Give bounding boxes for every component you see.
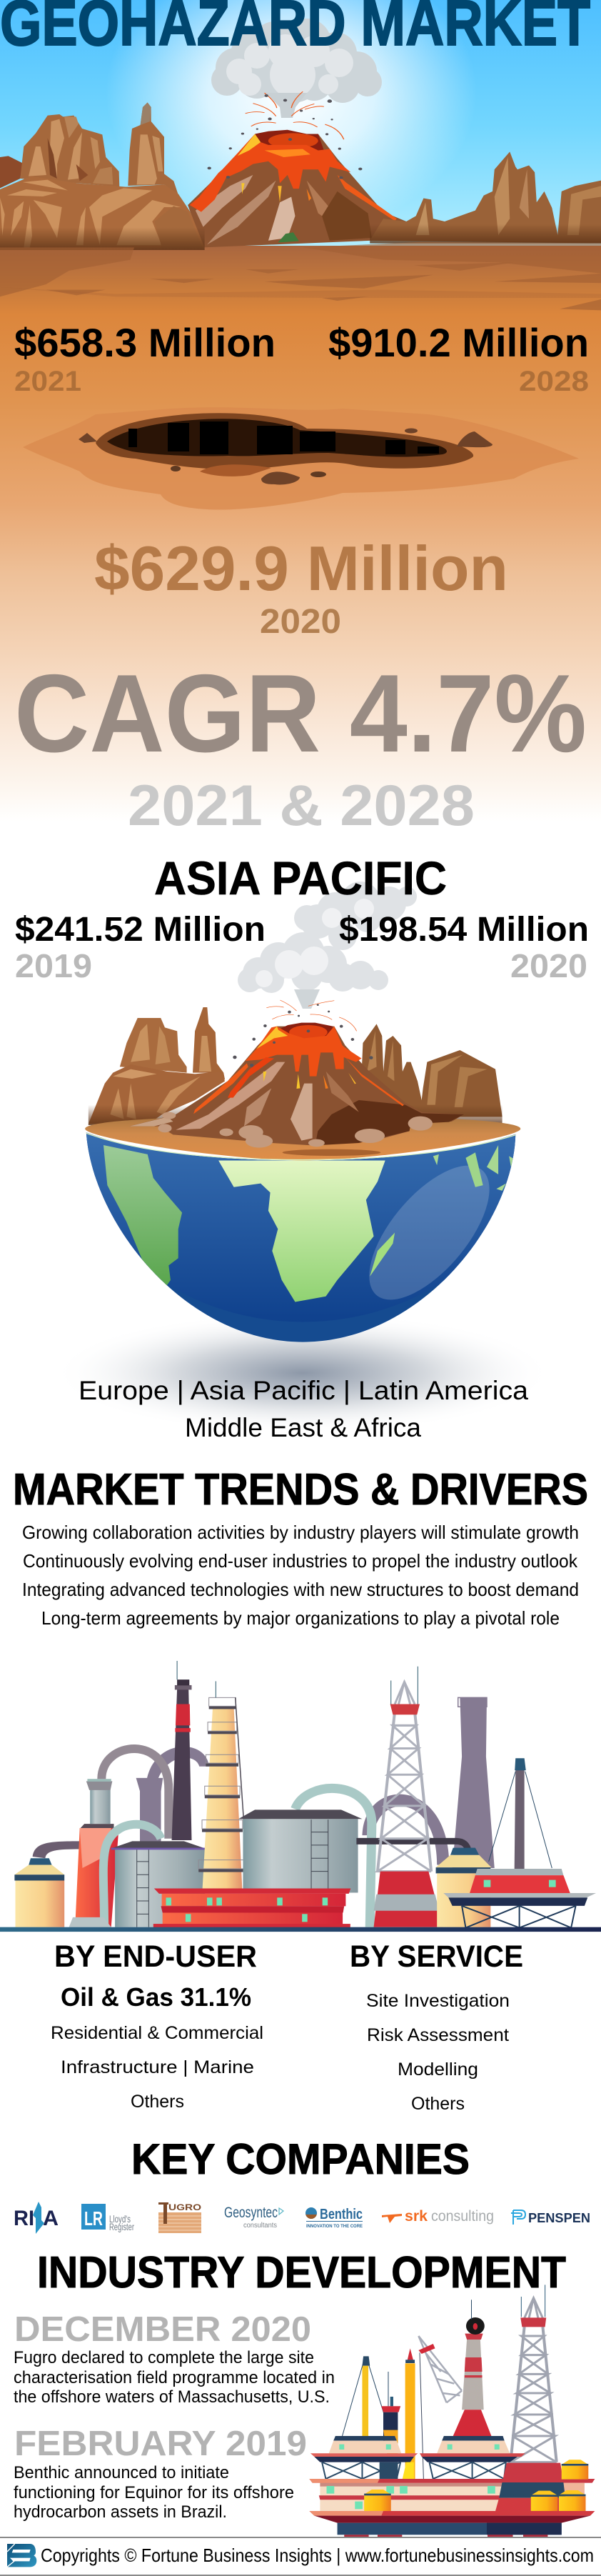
panel: by end-user: Infrastructure | Marine bbox=[61, 2057, 254, 2077]
logo: Benthic: Benthic bbox=[320, 2207, 363, 2222]
large storage tank bbox=[238, 1809, 362, 1892]
text: trends list: Integrating advanced technologies with new structures to boost demand bbox=[22, 1579, 579, 1600]
development: December 2020: characterisation field programme located in bbox=[14, 2368, 335, 2387]
stat: 2020 market size bbox=[94, 533, 508, 641]
rock formations bbox=[89, 1007, 502, 1125]
logo: Lloyd's Register bbox=[81, 2204, 134, 2232]
yellow barrels bbox=[364, 2460, 588, 2511]
logo: Fugro bbox=[158, 2202, 201, 2233]
footer bbox=[0, 2537, 601, 2576]
right tank bbox=[436, 1848, 491, 1927]
logo: Fugro: UGRO bbox=[168, 2202, 201, 2212]
panel: by service: Site Investigation bbox=[366, 1991, 510, 2011]
panel: by end-user: Oil & Gas 31.1% bbox=[61, 1982, 251, 2012]
logo: Lloyd's Register: Register bbox=[109, 2221, 134, 2232]
development: February 2019 bbox=[14, 2425, 307, 2522]
panel: by service bbox=[350, 1940, 523, 2114]
left tank bbox=[14, 1841, 81, 1927]
derrick bbox=[378, 1667, 431, 1872]
logo: RINA: A bbox=[43, 2207, 59, 2230]
disc bbox=[85, 1116, 520, 1160]
heading: industry development: INDUSTRY DEVELOPMENT bbox=[37, 2248, 566, 2297]
heading: key companies: KEY COMPANIES bbox=[131, 2135, 470, 2183]
stat: Asia Pacific 2019: $241.52 Million bbox=[15, 911, 266, 949]
logo: Benthic: INNOVATION TO THE CORE bbox=[306, 2225, 363, 2229]
ground shadows bbox=[0, 242, 601, 310]
stat: CAGR bbox=[14, 652, 587, 838]
text: trends list: Continuously evolving end-user industries to propel the industry outlook bbox=[23, 1550, 578, 1572]
panel: volcano landscape hero bbox=[0, 0, 601, 822]
red long building bbox=[153, 1889, 350, 1928]
development: February 2019: hydrocarbon assets in Brazil. bbox=[14, 2502, 227, 2522]
logo: srk consulting bbox=[382, 2208, 494, 2225]
stat: 2028 market size: 2028 bbox=[519, 366, 589, 397]
logo: Geosyntec bbox=[224, 2205, 283, 2230]
globe shadow bbox=[53, 1312, 552, 1434]
development: December 2020: Fugro declared to complete the large site bbox=[14, 2348, 314, 2367]
stat: 2021 market size bbox=[14, 320, 276, 397]
logo: srk consulting: consulting bbox=[431, 2208, 494, 2225]
stat: Asia Pacific 2019 bbox=[15, 911, 266, 984]
logo: Lloyd's Register: LR bbox=[84, 2207, 103, 2230]
globe bbox=[86, 1132, 515, 1342]
logo: Benthic bbox=[305, 2207, 363, 2229]
panel: by end-user bbox=[51, 1940, 263, 2112]
text: trends list bbox=[22, 1522, 579, 1629]
panel: by end-user: Residential & Commercial bbox=[51, 2023, 263, 2043]
right derrick bbox=[510, 2285, 557, 2462]
stat: Asia Pacific 2020: $198.54 Million bbox=[339, 911, 589, 949]
text: regions: Europe | Asia Pacific | Latin America bbox=[79, 1376, 528, 1405]
central tower bbox=[453, 2300, 491, 2436]
offshore platform bbox=[443, 1758, 596, 1928]
illustration: offshore oil rig bbox=[309, 2285, 595, 2537]
upper deck and body bbox=[309, 2479, 595, 2511]
development: December 2020 bbox=[14, 2310, 335, 2407]
logo: RINA: RI bbox=[14, 2207, 34, 2230]
logo: RINA bbox=[14, 2202, 59, 2234]
left module bbox=[310, 2436, 418, 2479]
hull bbox=[309, 2511, 595, 2537]
red building bbox=[76, 1779, 118, 1927]
icon: Fortune Business Insights logo bbox=[7, 2544, 36, 2567]
right module bbox=[420, 2436, 525, 2479]
development: December 2020: the offshore waters of Massachusetts, U.S. bbox=[14, 2387, 330, 2407]
development: February 2019: FEBRUARY 2019 bbox=[14, 2425, 307, 2463]
panel: by service: Risk Assessment bbox=[367, 2025, 509, 2045]
panel: by end-user: Others bbox=[131, 2092, 184, 2112]
stat: 2021 market size: 2021 bbox=[14, 366, 81, 397]
development: December 2020: DECEMBER 2020 bbox=[14, 2310, 311, 2349]
stat: Asia Pacific 2020: 2020 bbox=[510, 947, 587, 984]
logos: key companies bbox=[14, 2202, 590, 2234]
small storage tank bbox=[111, 1841, 205, 1927]
chimney bbox=[172, 1661, 191, 1840]
crane bbox=[418, 2336, 462, 2479]
floor line bbox=[0, 1927, 601, 1932]
stat: CAGR: 2021 & 2028 bbox=[128, 774, 475, 838]
background silhouettes bbox=[136, 1697, 495, 1868]
logo: srk consulting: srk bbox=[405, 2208, 428, 2225]
text: regions bbox=[79, 1376, 528, 1442]
stat: 2020 market size: $629.9 Million bbox=[94, 533, 508, 604]
yellow masts bbox=[343, 2348, 415, 2479]
text: regions: Middle East & Africa bbox=[185, 1413, 421, 1442]
development: February 2019: Benthic announced to initiate bbox=[14, 2463, 229, 2482]
illustration: desert rock formations bbox=[0, 102, 601, 250]
stat: 2028 market size bbox=[328, 320, 589, 397]
stat: 2020 market size: 2020 bbox=[260, 603, 341, 641]
text: trends list: Long-term agreements by major organizations to play a pivotal role bbox=[41, 1607, 560, 1629]
logo: Geosyntec: Geosyntec bbox=[224, 2205, 278, 2221]
panel: by service: BY SERVICE bbox=[350, 1940, 523, 1974]
logo: Lloyd's Register: Lloyd's bbox=[109, 2213, 131, 2225]
tower bbox=[198, 1681, 248, 1889]
text: trends list: Growing collaboration activities by industry players will stimulate growth bbox=[22, 1522, 579, 1543]
derrick base bbox=[374, 1872, 443, 1927]
pipe arches bbox=[101, 1749, 372, 1927]
stat: 2021 market size: $658.3 Million bbox=[14, 320, 276, 365]
illustration: industrial plant bbox=[0, 1661, 601, 1932]
panel: by end-user: BY END-USER bbox=[54, 1940, 257, 1974]
panel: by service: Modelling bbox=[398, 2060, 478, 2080]
volcano cloud bbox=[238, 882, 417, 1009]
logo: Geosyntec: consultants bbox=[243, 2222, 277, 2230]
illustration: ground sinkhole bbox=[23, 407, 579, 510]
panel: by service: Others bbox=[411, 2094, 465, 2114]
illustration: volcano erupting with cloud bbox=[188, 19, 406, 247]
derrick base on deck bbox=[495, 2463, 571, 2512]
illustration: half globe with volcano bbox=[85, 882, 521, 1420]
stat: Asia Pacific 2020 bbox=[339, 911, 589, 984]
stat: Asia Pacific 2019: 2019 bbox=[15, 947, 92, 984]
volcano bbox=[129, 1000, 464, 1156]
logo: Penspen: PENSPEN bbox=[528, 2211, 590, 2225]
heading: Asia Pacific: ASIA PACIFIC bbox=[154, 852, 447, 904]
stat: 2028 market size: $910.2 Million bbox=[328, 320, 589, 365]
development: February 2019: functioning for Equinor for its offshore bbox=[14, 2483, 294, 2502]
